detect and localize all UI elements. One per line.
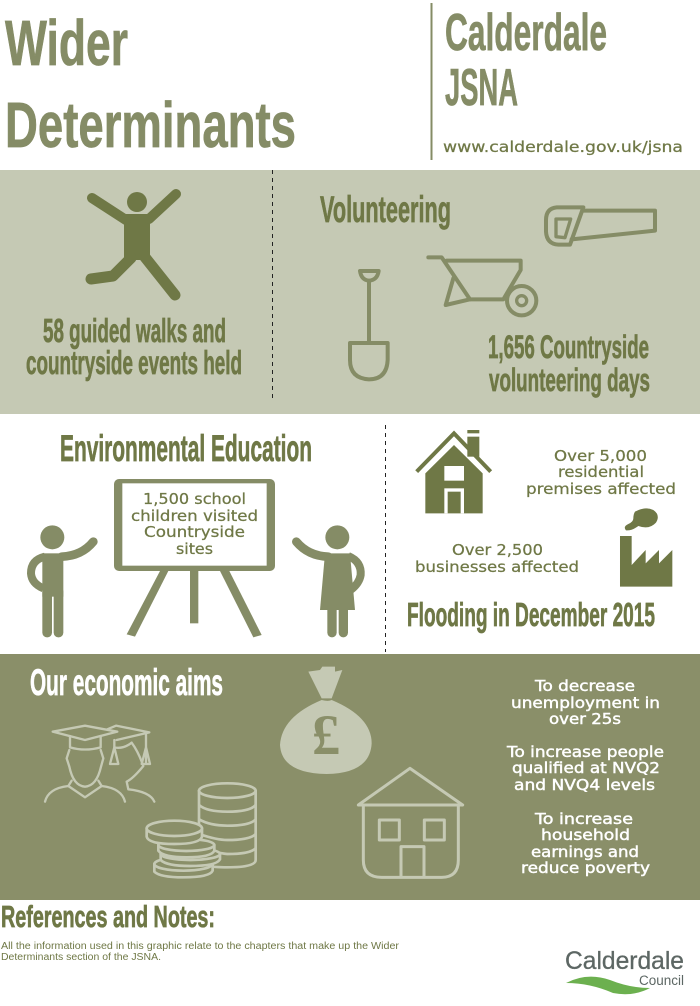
text: economic aims list: To decrease — [534, 677, 635, 695]
icon: wheelbarrow — [428, 257, 536, 315]
text: school children: Countryside — [144, 523, 245, 541]
text: economic aims list: household — [541, 826, 630, 844]
text: economic aims list: To increase people — [506, 743, 664, 761]
icon: jumping figure — [91, 192, 176, 295]
text: businesses affected — [415, 541, 579, 576]
panel: references — [1, 899, 684, 994]
text: guided walks: 58 guided walks and — [43, 312, 226, 349]
text: residential premises: residential — [558, 463, 644, 481]
text: businesses affected: Over 2,500 — [452, 541, 543, 559]
icon: boy pointing — [31, 525, 93, 637]
heading: Environmental Education: Environmental Education — [60, 428, 312, 469]
icon: girl pointing — [296, 525, 361, 637]
logo: Calderdale Council: Council — [639, 973, 684, 988]
icon: shovel — [350, 271, 388, 379]
text: guided walks: countryside events held — [26, 344, 242, 381]
text: economic aims list: earnings and — [531, 843, 639, 861]
text: volunteering days — [488, 329, 650, 398]
text: economic aims list: To increase — [534, 810, 633, 828]
text: school children: children visited — [131, 507, 258, 525]
text: residential premises — [526, 447, 676, 498]
heading: References and Notes: References and Notes: — [1, 899, 215, 934]
text: economic aims list: qualified at NVQ2 — [512, 759, 660, 777]
icon: saw — [546, 207, 655, 245]
icon: money bag: £ — [312, 705, 340, 767]
icon: coins — [147, 783, 256, 877]
text: economic aims list: over 25s — [549, 710, 621, 728]
logo: Calderdale Council: Calderdale — [565, 947, 684, 975]
text: school children: 1,500 school — [143, 490, 246, 508]
text: economic aims list: unemployment in — [511, 694, 660, 712]
icon: house — [417, 430, 491, 513]
panel: economic aims — [0, 654, 700, 900]
title: Wider Determinants: Determinants — [5, 89, 296, 161]
text: residential premises: Over 5,000 — [554, 447, 647, 465]
heading: Calderdale JSNA — [445, 4, 607, 117]
text: guided walks — [26, 312, 242, 381]
website url: www.calderdale.gov.uk/jsna — [443, 138, 683, 156]
panel: walks and volunteering — [0, 170, 700, 414]
text: school children: sites — [176, 540, 213, 558]
title: Wider Determinants: Wider — [5, 7, 128, 79]
icon: house outline — [358, 768, 463, 877]
panel: flooding — [407, 430, 676, 633]
heading: Volunteering: Volunteering — [320, 189, 451, 230]
text: economic aims list: and NVQ4 levels — [514, 776, 655, 794]
icon: presentation board — [114, 479, 275, 637]
text: economic aims list — [506, 677, 664, 877]
header — [5, 3, 683, 161]
panel: environmental education — [31, 425, 385, 652]
text: references note — [1, 941, 400, 963]
icon: factory — [620, 508, 672, 587]
text: residential premises: premises affected — [526, 480, 676, 498]
logo: Calderdale Council — [565, 947, 684, 994]
text: economic aims list: reduce poverty — [521, 859, 650, 877]
text: school children — [131, 490, 258, 558]
heading: Calderdale JSNA: JSNA — [445, 59, 518, 117]
text: businesses affected: businesses affected — [415, 558, 579, 576]
text: references note: All the information used in this graphic relate to the chapters that make up the Wider — [1, 941, 400, 952]
heading: Our economic aims: Our economic aims — [30, 662, 223, 703]
title: Wider Determinants — [5, 7, 296, 161]
icon: money bag — [280, 667, 372, 774]
icon: graduates — [45, 726, 154, 802]
text: references note: Determinants section of the JSNA. — [1, 952, 161, 963]
